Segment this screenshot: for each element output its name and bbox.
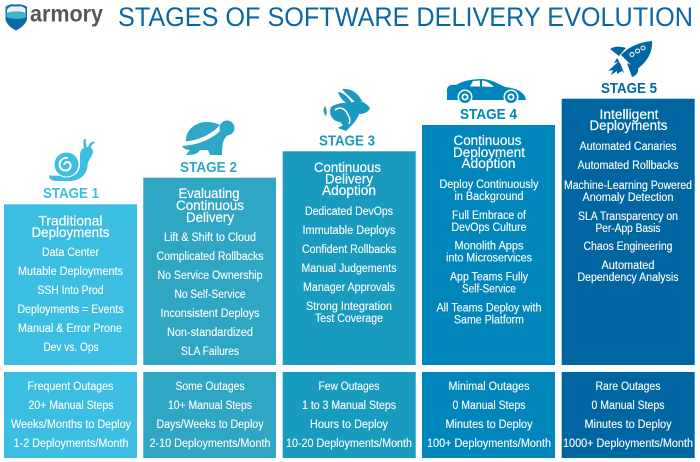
panel: stage 1 metrics bbox=[4, 372, 137, 458]
list: stage 4 practices: Self-Service bbox=[462, 284, 516, 296]
list: stage 2 practices: No Self-Service bbox=[174, 289, 246, 301]
list: stage 3 practices: Test Coverage bbox=[315, 313, 383, 325]
list: stage 4 practices: Monolith Apps bbox=[454, 240, 524, 252]
heading: intelligent deployments: Intelligent bbox=[600, 107, 659, 122]
list: stage 5 metrics: Rare Outages bbox=[596, 381, 661, 393]
list: stage 3 metrics: 10-20 Deployments/Month bbox=[286, 438, 412, 450]
stage 5 column bbox=[562, 41, 695, 458]
list: stage 5 metrics bbox=[563, 381, 693, 450]
icon: shield bbox=[6, 4, 27, 30]
list: stage 4 practices: in Background bbox=[454, 191, 524, 203]
list: stage 5 practices bbox=[564, 141, 692, 284]
heading: continuous delivery adoption: Continuous bbox=[314, 160, 381, 175]
list: stage 2 practices: Inconsistent Deploys bbox=[160, 308, 260, 320]
list: stage 5 practices: Automated Canaries bbox=[580, 141, 677, 153]
panel: stage 1 practices bbox=[4, 204, 137, 365]
list: stage 1 practices: Deployments = Events bbox=[18, 304, 124, 316]
label: stage 5: STAGE 5 bbox=[601, 80, 657, 97]
list: stage 4 practices: Same Platform bbox=[454, 314, 524, 326]
stage 3 column bbox=[283, 89, 416, 458]
list: stage 2 practices: Complicated Rollbacks bbox=[156, 251, 264, 263]
list: stage 5 practices: Dependency Analysis bbox=[578, 272, 679, 284]
list: stage 4 practices: All Teams Deploy with bbox=[436, 302, 542, 314]
icon: turtle bbox=[182, 120, 234, 155]
list: stage 5 metrics: Minutes to Deploy bbox=[584, 419, 672, 431]
label: stage 1: STAGE 1 bbox=[43, 185, 99, 202]
panel: stage 3 metrics bbox=[283, 372, 416, 458]
list: stage 2 metrics: Some Outages bbox=[176, 381, 245, 393]
list: stage 1 practices bbox=[18, 247, 124, 354]
logo: armory bbox=[6, 0, 103, 30]
list: stage 3 practices: Manual Judgements bbox=[302, 263, 397, 275]
list: stage 4 practices: DevOps Culture bbox=[452, 222, 526, 234]
list: stage 4 metrics: Minutes to Deploy bbox=[446, 419, 533, 431]
list: stage 1 practices: Data Center bbox=[42, 247, 99, 259]
list: stage 3 practices: Strong Integration bbox=[306, 301, 392, 313]
list: stage 3 metrics: Hours to Deploy bbox=[310, 419, 388, 431]
list: stage 5 practices: Per-App Basis bbox=[596, 223, 661, 235]
stage 2 column bbox=[143, 120, 276, 458]
list: stage 2 practices: No Service Ownership bbox=[158, 270, 262, 282]
list: stage 5 practices: Automated Rollbacks bbox=[578, 160, 679, 172]
list: stage 1 metrics: Weeks/Months to Deploy bbox=[11, 419, 131, 431]
list: stage 3 metrics bbox=[286, 381, 412, 450]
list: stage 3 practices: Confident Rollbacks bbox=[302, 244, 396, 256]
panel: stage 4 practices bbox=[422, 125, 555, 365]
heading: continuous delivery adoption: Delivery bbox=[325, 172, 373, 186]
heading: intelligent deployments bbox=[590, 107, 668, 133]
heading: traditional deployments: Deployments bbox=[32, 225, 110, 240]
heading: traditional deployments: Traditional bbox=[38, 214, 102, 228]
list: stage 1 metrics: 1-2 Deployments/Month bbox=[14, 438, 128, 450]
list: stage 4 metrics bbox=[427, 381, 551, 450]
list: stage 4 practices bbox=[436, 179, 542, 326]
label: stage 3: STAGE 3 bbox=[319, 132, 375, 150]
list: stage 2 metrics bbox=[150, 381, 270, 450]
list: stage 1 metrics: 20+ Manual Steps bbox=[28, 400, 114, 412]
list: stage 3 metrics: Few Outages bbox=[318, 381, 380, 393]
icon: snail bbox=[49, 139, 95, 181]
list: stage 3 practices: Manager Approvals bbox=[303, 282, 395, 294]
wordmark: armory bbox=[30, 0, 103, 26]
list: stage 5 practices: Automated bbox=[602, 260, 654, 272]
icon: rabbit bbox=[324, 89, 370, 131]
list: stage 5 practices: Chaos Engineering bbox=[584, 241, 672, 253]
heading: continuous delivery adoption bbox=[314, 160, 381, 198]
list: stage 4 practices: into Microservices bbox=[446, 252, 532, 264]
heading: continuous delivery adoption: Adoption bbox=[322, 183, 376, 198]
list: stage 2 metrics: 10+ Manual Steps bbox=[168, 400, 252, 412]
stage 4 column bbox=[422, 79, 555, 458]
heading: evaluating continuous delivery: Delivery bbox=[186, 210, 234, 225]
list: stage 1 metrics bbox=[11, 381, 131, 450]
list: stage 4 practices: App Teams Fully bbox=[450, 272, 528, 284]
list: stage 3 metrics: 1 to 3 Manual Steps bbox=[302, 400, 396, 412]
list: stage 1 practices: Mutable Deployments bbox=[18, 266, 123, 278]
list: stage 4 metrics: 100+ Deployments/Month bbox=[427, 438, 551, 450]
heading: traditional deployments bbox=[32, 214, 110, 240]
label: stage 2: STAGE 2 bbox=[180, 159, 237, 176]
panel: stage 4 metrics bbox=[422, 372, 555, 458]
list: stage 2 metrics: 2-10 Deployments/Month bbox=[150, 438, 270, 450]
list: stage 2 practices: Non-standardized bbox=[167, 327, 253, 339]
list: stage 3 practices: Immutable Deploys bbox=[302, 225, 396, 237]
heading: continuous deployment adoption bbox=[453, 133, 525, 171]
panel: stage 5 metrics bbox=[562, 372, 695, 458]
list: stage 2 practices: Lift & Shift to Cloud bbox=[164, 232, 256, 244]
list: stage 5 practices: Anomaly Detection bbox=[582, 192, 674, 204]
icon: rocket bbox=[608, 41, 652, 77]
panel: stage 2 practices bbox=[143, 178, 276, 365]
list: stage 4 practices: Full Embrace of bbox=[452, 210, 527, 222]
list: stage 1 practices: Dev vs. Ops bbox=[44, 342, 99, 354]
list: stage 2 practices bbox=[156, 232, 264, 358]
list: stage 3 practices: Dedicated DevOps bbox=[305, 206, 393, 218]
list: stage 1 practices: Manual & Error Prone bbox=[18, 323, 122, 335]
panel: stage 2 metrics bbox=[143, 372, 276, 458]
heading: evaluating continuous delivery: Continuous bbox=[176, 198, 244, 213]
list: stage 2 metrics: Days/Weeks to Deploy bbox=[156, 419, 264, 431]
list: stage 4 practices: Deploy Continuously bbox=[440, 179, 539, 191]
heading: continuous deployment adoption: Deployment bbox=[453, 145, 525, 160]
list: stage 1 practices: SSH Into Prod bbox=[38, 285, 104, 297]
icon: sports car bbox=[447, 79, 526, 104]
stage 1 column bbox=[4, 139, 137, 458]
list: stage 5 practices: SLA Transparency on bbox=[578, 211, 678, 223]
panel: stage 5 practices bbox=[562, 99, 695, 365]
heading: continuous deployment adoption: Continuous bbox=[454, 133, 522, 148]
list: stage 2 practices: SLA Failures bbox=[181, 346, 239, 358]
heading: continuous deployment adoption: Adoption bbox=[462, 156, 516, 171]
heading: evaluating continuous delivery bbox=[176, 186, 244, 225]
list: stage 4 metrics: 0 Manual Steps bbox=[452, 400, 526, 412]
heading: evaluating continuous delivery: Evaluating bbox=[178, 186, 240, 201]
heading: intelligent deployments: Deployments bbox=[590, 118, 668, 133]
panel: stage 3 practices bbox=[283, 151, 416, 365]
list: stage 3 practices bbox=[302, 206, 397, 325]
list: stage 1 metrics: Frequent Outages bbox=[28, 381, 114, 393]
label: stage 4: STAGE 4 bbox=[460, 106, 518, 123]
list: stage 4 metrics: Minimal Outages bbox=[448, 381, 530, 393]
list: stage 5 metrics: 0 Manual Steps bbox=[592, 400, 665, 412]
list: stage 5 metrics: 1000+ Deployments/Month bbox=[563, 438, 693, 450]
